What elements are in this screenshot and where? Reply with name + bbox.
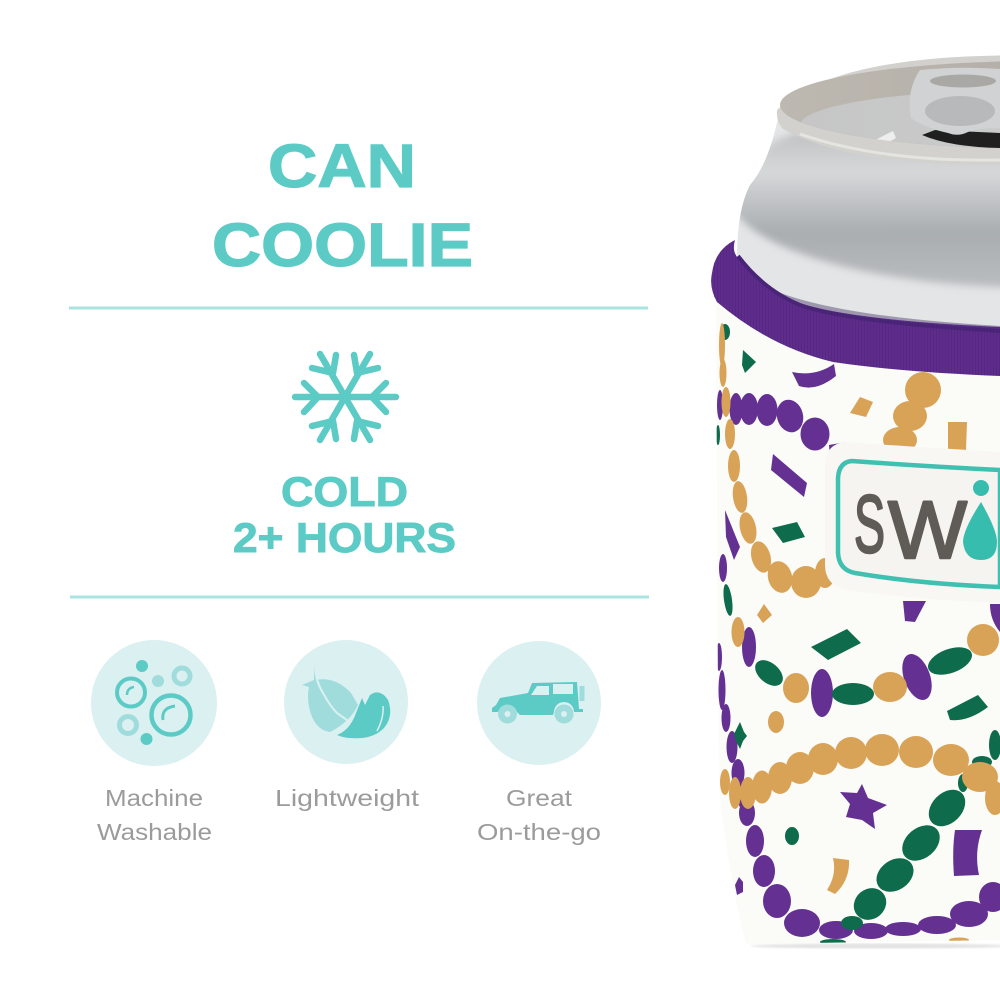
feature: great on-the-go — [477, 641, 601, 845]
coolie sleeve — [716, 300, 1000, 944]
brand wordmark: W — [888, 485, 968, 576]
label: Washable — [97, 819, 212, 845]
icon: logo droplet — [963, 480, 997, 560]
label: On-the-go — [477, 819, 601, 845]
can rim — [777, 56, 1000, 165]
label: Great — [506, 785, 573, 811]
product: can in coolie — [711, 56, 1000, 948]
icon: feather — [302, 665, 390, 738]
icon: snowflake — [295, 354, 396, 440]
cold duration heading: 2+ HOURS — [233, 514, 456, 561]
pull tab — [910, 68, 1000, 135]
can lid — [801, 94, 1000, 148]
icon: bubbles — [117, 660, 190, 745]
cold duration heading — [233, 468, 456, 561]
title — [212, 132, 473, 279]
feature: machine washable — [91, 640, 217, 845]
purple collar — [711, 240, 1000, 376]
aluminium can — [737, 56, 1000, 327]
title: COOLIE — [212, 211, 473, 279]
label: Machine — [105, 785, 203, 811]
cold duration heading: COLD — [281, 468, 408, 515]
title: CAN — [268, 132, 416, 200]
label — [97, 785, 212, 845]
sleeve pattern: beads and confetti — [716, 323, 1000, 945]
logo patch — [825, 442, 1000, 603]
can body shading — [737, 120, 1000, 327]
label — [477, 785, 601, 845]
feature: lightweight — [275, 640, 420, 811]
soft floor shadow — [750, 944, 1000, 948]
brand wordmark — [854, 479, 968, 576]
brand wordmark: S — [854, 479, 885, 570]
label: Lightweight — [275, 785, 420, 811]
icon: jeep — [492, 682, 584, 724]
